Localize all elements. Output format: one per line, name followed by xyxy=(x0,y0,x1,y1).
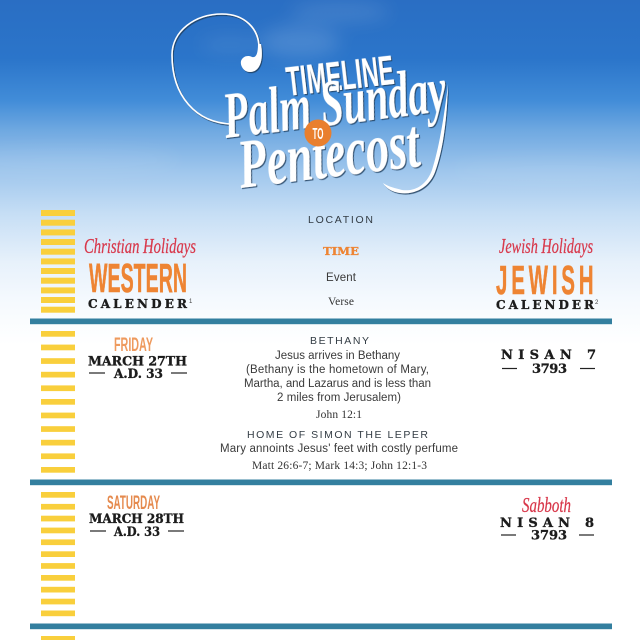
badge: TO: TO xyxy=(312,126,324,143)
label: CALENDER 1: CALENDER xyxy=(88,297,188,311)
title lockup xyxy=(172,14,451,204)
event: Jesus arrives in Bethany: Jesus arrives in Bethany xyxy=(275,350,400,362)
label: MARCH 28TH: MARCH 28TH xyxy=(89,512,184,527)
label: Sabboth: Sabboth xyxy=(522,493,571,517)
label: CALENDER 2: 2 xyxy=(595,300,599,306)
event: Jesus arrives in Bethany: Martha, and Lazarus and is less than xyxy=(244,378,431,390)
label: 3793: 3793 xyxy=(532,362,567,377)
label: MARCH 27TH: MARCH 27TH xyxy=(88,354,187,370)
stripes: Saturday row xyxy=(41,492,75,616)
event: Mary annoints Jesus' feet: Mary annoints Jesus' feet with costly perfume xyxy=(220,443,458,455)
stripes: next row, cut off by the page edge xyxy=(41,636,75,640)
label: Jewish Holidays: Jewish Holidays xyxy=(499,234,593,258)
badge: TO xyxy=(304,120,332,146)
heading: TIMELINE: TIMELINE xyxy=(284,46,396,105)
label: 3793: 3793 xyxy=(531,528,567,544)
label: Christian Holidays: Christian Holidays xyxy=(84,234,196,258)
stripes: Friday row xyxy=(41,331,75,473)
label: A.D. 33: A.D. 33 xyxy=(113,367,163,382)
event: Jesus arrives in Bethany: (Bethany is the hometown of Mary, xyxy=(246,364,429,376)
panel: Saturday jewish date xyxy=(500,493,594,544)
panel: western calendar key xyxy=(84,234,196,311)
panel: Friday western date xyxy=(88,335,187,382)
heading: Pentecost: Pentecost xyxy=(233,105,425,204)
sky background xyxy=(0,0,640,345)
label: CALENDER 2: CALENDER xyxy=(496,298,595,312)
label: NISAN 7: NISAN 7 xyxy=(501,348,596,363)
panel: jewish calendar key xyxy=(496,234,599,312)
location: BETHANY: BETHANY xyxy=(310,335,369,347)
verse: Matt 26:6-7: Matt 26:6-7; Mark 14:3; John 12:1-3 xyxy=(252,460,427,472)
panel: Saturday western date xyxy=(89,493,184,540)
panel: Friday jewish date xyxy=(501,348,596,377)
decorative swash: right tail xyxy=(383,84,448,193)
label: NISAN 8: NISAN 8 xyxy=(500,516,594,531)
decorative swash: left loop xyxy=(172,14,262,124)
label: Event: Event xyxy=(326,272,357,284)
event: Jesus arrives in Bethany xyxy=(244,350,431,404)
panel: Friday events xyxy=(220,335,458,472)
heading: JEWISH: JEWISH xyxy=(496,257,597,303)
divider bars xyxy=(30,318,612,629)
verse: John 12:1: John 12:1 xyxy=(316,409,362,421)
label: Verse: Verse xyxy=(328,296,354,308)
location: HOME OF SIMON THE LEPER: HOME OF SIMON THE LEPER xyxy=(247,429,428,441)
label: LOCATION: LOCATION xyxy=(308,214,373,226)
label: TIME: TIME xyxy=(323,245,359,258)
label: SATURDAY: SATURDAY xyxy=(107,493,160,514)
panel: western calendar key: WESTERN xyxy=(89,255,187,301)
stripes: header row xyxy=(41,210,75,313)
heading: Palm Sunday: Palm Sunday xyxy=(218,53,451,153)
label: FRIDAY: FRIDAY xyxy=(114,335,153,356)
label: CALENDER 1: 1 xyxy=(189,299,193,305)
event: Jesus arrives in Bethany: 2 miles from Jerusalem) xyxy=(277,392,401,404)
label: A.D. 33: A.D. 33 xyxy=(113,525,160,540)
panel: legend centre xyxy=(308,214,373,308)
